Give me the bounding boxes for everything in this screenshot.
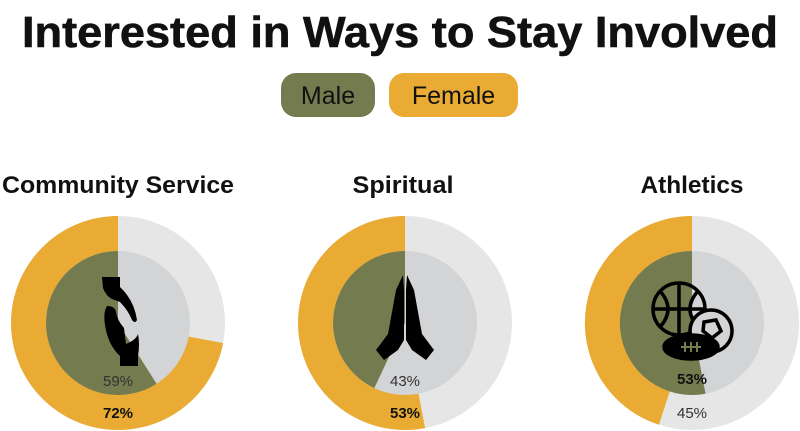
title: Interested in Ways to Stay Involved xyxy=(22,8,778,57)
icon: praying hands xyxy=(376,275,434,360)
heading: spiritual: Spiritual xyxy=(352,172,454,199)
label: female 45%: 45% xyxy=(677,405,707,422)
donut chart: athletics xyxy=(585,216,799,430)
donut chart: spiritual xyxy=(298,216,512,430)
label: female 72%: 72% xyxy=(103,405,133,422)
label: male 53%: 53% xyxy=(677,371,707,388)
panel: spiritual xyxy=(298,172,512,430)
legend: male xyxy=(281,73,375,117)
label: female 53%: 53% xyxy=(390,405,420,422)
heading: community service: Community Service xyxy=(2,172,234,199)
panel: athletics xyxy=(585,172,799,430)
donut chart: community service xyxy=(11,216,225,430)
label: male 43%: 43% xyxy=(390,373,420,390)
panel: community service xyxy=(2,172,234,430)
legend: female xyxy=(389,73,518,117)
icon: helping hands xyxy=(102,277,139,366)
label: male 59%: 59% xyxy=(103,373,133,390)
heading: athletics: Athletics xyxy=(640,172,744,199)
legend: female: Female xyxy=(412,82,495,110)
legend xyxy=(281,73,518,117)
legend: male: Male xyxy=(301,82,355,110)
icon: sports balls xyxy=(653,283,732,359)
